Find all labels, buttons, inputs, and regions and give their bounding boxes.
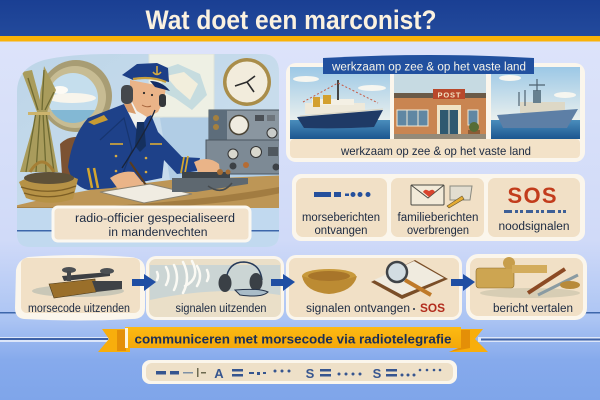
icon: wicker basket bbox=[19, 162, 78, 203]
banner: communication statement bbox=[98, 327, 488, 352]
icon: headphones bbox=[218, 262, 268, 296]
decorative lines beside banner bbox=[0, 337, 108, 342]
icon: chair bbox=[60, 136, 76, 175]
morse strip: A bbox=[214, 366, 224, 381]
step: translating message bbox=[466, 254, 587, 320]
task: family messages: overbrengen bbox=[407, 225, 469, 237]
morse strip: S bbox=[306, 366, 315, 381]
decorative line left bbox=[0, 312, 20, 314]
task: family messages: familieberichten bbox=[398, 212, 478, 224]
task: morse messages: ontvangen bbox=[314, 225, 368, 237]
shirt and tie bbox=[124, 102, 148, 129]
icon: envelope with heart bbox=[411, 185, 472, 208]
task: morse messages bbox=[296, 178, 387, 237]
panel: three tasks bbox=[292, 174, 585, 241]
icon: notebook bbox=[100, 184, 192, 203]
photo: post office: POST bbox=[438, 90, 461, 100]
task: distress signals bbox=[488, 178, 580, 237]
icon: headset bbox=[121, 85, 133, 104]
icon: morse line bbox=[504, 210, 566, 213]
step: sending signals: signalen uitzenden bbox=[176, 303, 266, 315]
task: morse messages: morseberichten bbox=[302, 212, 380, 224]
cap bbox=[122, 63, 169, 82]
step: sending signals bbox=[146, 256, 284, 320]
step: morse code sending: morsecode uitzenden bbox=[28, 303, 130, 315]
step: receiving signals bbox=[286, 255, 462, 320]
title: Wat doet een marconist? bbox=[146, 5, 436, 35]
task: family messages bbox=[391, 178, 484, 237]
icon: morse dashes bbox=[314, 192, 370, 197]
task: distress signals: noodsignalen bbox=[498, 221, 570, 233]
photo: passenger ship bbox=[290, 67, 390, 139]
face bbox=[130, 80, 166, 117]
panel: at sea and on land bbox=[286, 55, 585, 162]
photo: post office bbox=[394, 67, 486, 139]
label: radio officer caption bbox=[53, 207, 250, 241]
icon: telegraph key bbox=[32, 267, 124, 298]
icon: wall map bbox=[149, 54, 214, 117]
arrow: step 1 to 2 bbox=[132, 274, 156, 291]
step: morse code sending bbox=[15, 255, 145, 320]
label: radio officer caption: radio-officier gespecialiseerd bbox=[75, 213, 235, 225]
shoulder board bbox=[88, 115, 108, 125]
banner: communication statement: communiceren met morsecode via radiotelegrafie bbox=[134, 332, 452, 346]
icon: wall clock bbox=[223, 58, 271, 106]
pocket flaps and buttons bbox=[110, 143, 162, 145]
caption strip: werkzaam op zee & op het vaste land bbox=[340, 144, 531, 158]
icon: sound waves bbox=[157, 261, 208, 293]
arrow: step 3 to 4 bbox=[451, 274, 475, 291]
icon: radio equipment bbox=[206, 110, 286, 174]
ribbon heading: werkzaam op zee & op het vaste land bbox=[331, 62, 526, 74]
step: receiving signals: SOS bbox=[420, 303, 445, 315]
photo: naval ship bbox=[491, 67, 580, 139]
icon: basket bbox=[302, 269, 357, 294]
caption strip bbox=[290, 139, 580, 158]
icon: book and magnifier bbox=[371, 260, 448, 299]
icon: officer bbox=[68, 63, 220, 190]
panel: radio officer illustration bbox=[10, 54, 290, 247]
cuffs bbox=[181, 156, 188, 173]
icon: wooden box and tools bbox=[476, 257, 580, 298]
morse strip bbox=[142, 360, 457, 384]
step: translating message: bericht vertalen bbox=[493, 303, 573, 315]
step: receiving signals: signalen ontvangen bbox=[306, 303, 410, 315]
SOS: SOS bbox=[508, 183, 556, 208]
ribbon heading bbox=[323, 55, 534, 74]
icon: porthole bbox=[40, 60, 112, 132]
icon: morse key on desk bbox=[172, 169, 248, 192]
icon: reed bundle bbox=[20, 66, 58, 172]
arrow: step 2 to 3 bbox=[271, 274, 295, 291]
morse strip: S bbox=[373, 366, 382, 381]
icon: desk bbox=[10, 175, 290, 208]
uniform bbox=[68, 104, 200, 190]
title banner bbox=[0, 0, 600, 42]
hands bbox=[110, 172, 144, 188]
label: radio officer caption: in mandenvechten bbox=[108, 227, 208, 239]
